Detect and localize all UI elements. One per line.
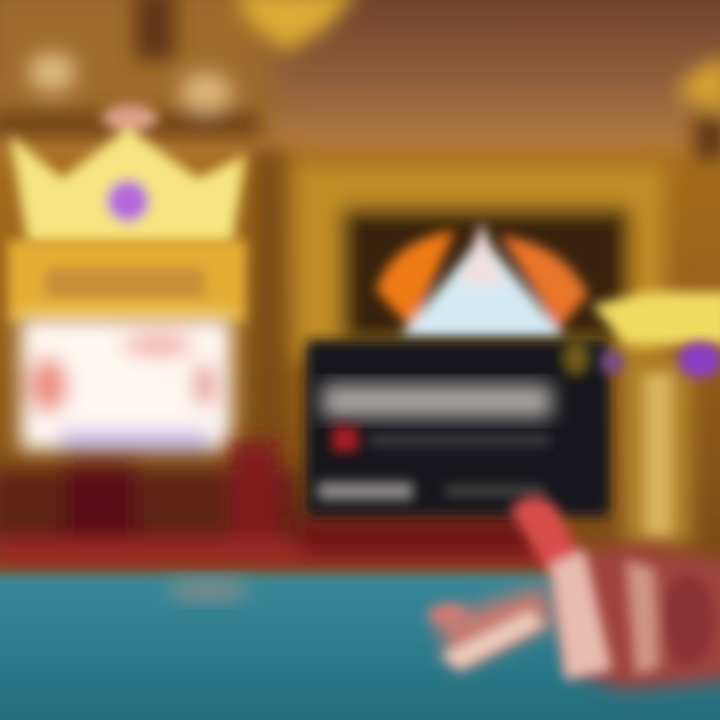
red seats xyxy=(0,440,560,568)
chip shadow xyxy=(166,578,250,602)
sub-text blur xyxy=(318,426,550,500)
ceiling ornaments xyxy=(0,0,720,160)
panel: black sign xyxy=(306,340,610,516)
heading text blur xyxy=(322,384,552,418)
background: ceiling xyxy=(0,0,720,170)
background: gold wall xyxy=(0,150,720,570)
lamp and pillar xyxy=(562,292,720,545)
hand xyxy=(428,496,720,690)
table xyxy=(0,574,720,720)
icon: orange and white triangle xyxy=(376,222,588,338)
wall panel: central gold frame xyxy=(252,150,665,450)
banner xyxy=(8,240,246,322)
panel: crown sign xyxy=(8,104,246,452)
icon: crown xyxy=(10,104,246,245)
white prize board xyxy=(20,318,232,452)
